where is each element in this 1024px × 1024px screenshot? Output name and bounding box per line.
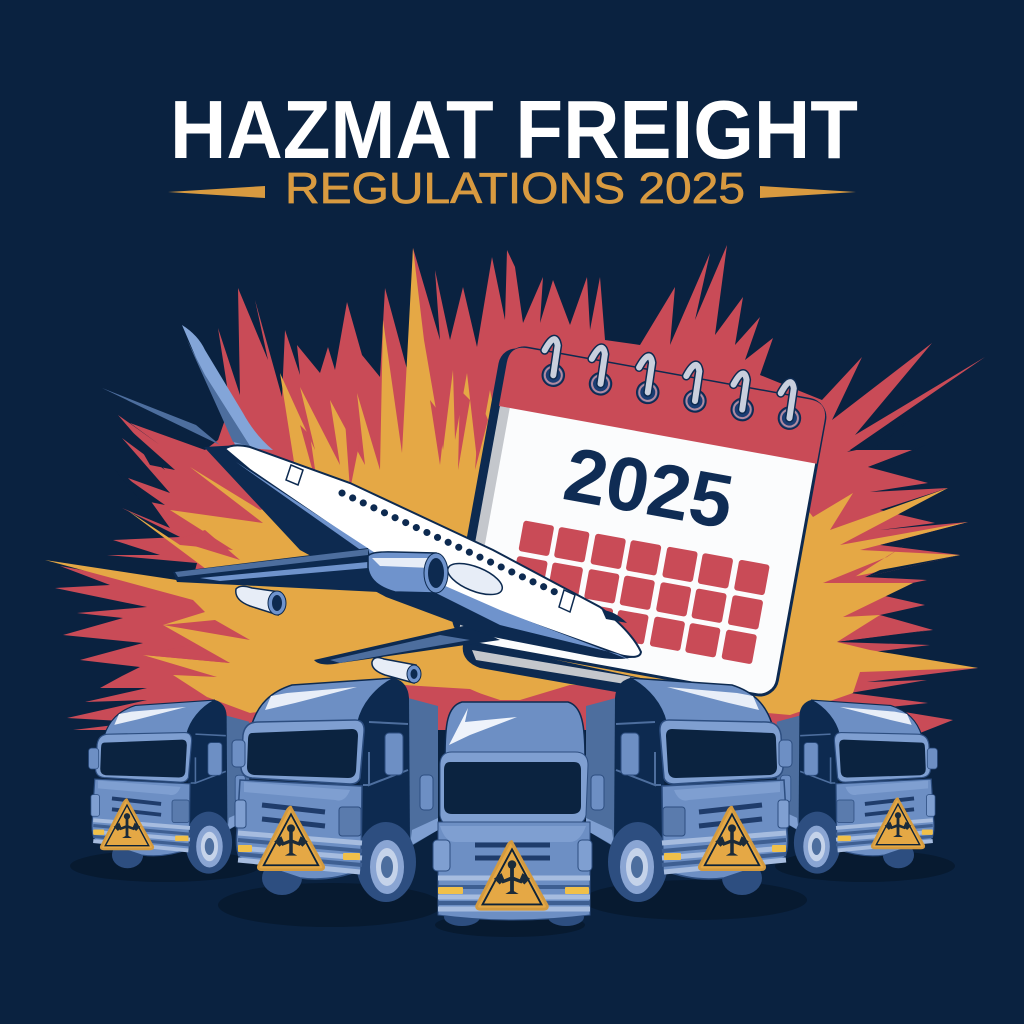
tail stabilizer [102,388,220,445]
tail fin [182,325,273,450]
calendar header [499,345,828,464]
airplane [102,325,641,683]
fuselage belly [204,445,640,659]
truck: far left [89,700,249,874]
calendar [448,330,830,698]
title [168,83,858,213]
winglet pod [444,557,506,601]
main wing [173,548,379,592]
calendar spine shadow [449,346,551,643]
year label: 2025 [558,432,739,546]
passenger windows [342,493,555,592]
date grid [506,520,770,664]
fuselage [225,445,641,657]
spiral rings [539,338,807,431]
yellow burst core [45,248,978,715]
rear wing [314,625,500,664]
explosion burst [45,245,985,733]
red burst [55,245,985,733]
dark slashes at the burst edge [115,420,960,642]
engine left [236,586,286,615]
doors [286,465,575,612]
subheading: Regulations 2025: REGULATIONS 2025 [285,164,745,213]
engine main [368,552,448,593]
truck: inner left [232,678,438,902]
truck: far right [777,700,937,874]
red streaks over the core [143,390,905,702]
truck: inner right [586,678,792,902]
truck: center [433,702,592,926]
cockpit window [602,610,627,623]
heading: Hazmat Freight: HAZMAT FREIGHT [170,83,858,176]
engine lower [372,658,421,683]
ground shadows [70,850,955,937]
calendar page stack [463,640,650,698]
calendar body [456,345,828,698]
